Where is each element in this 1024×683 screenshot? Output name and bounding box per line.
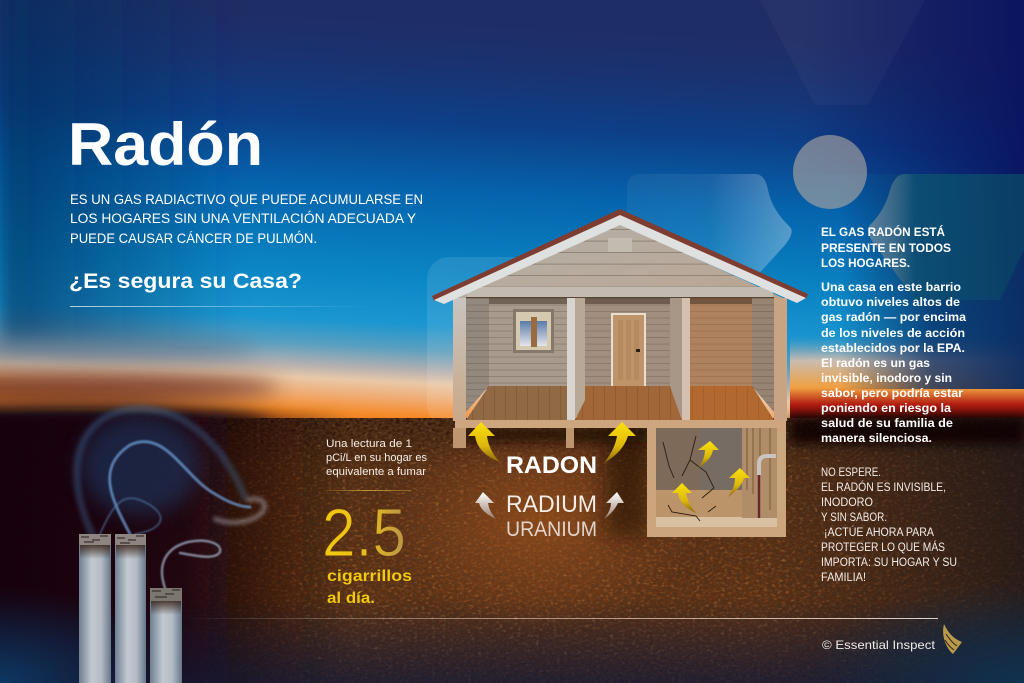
background: evening sky	[0, 0, 1024, 448]
cigarette smoke	[77, 409, 265, 588]
cigarette middle	[115, 534, 146, 683]
white arrow right	[604, 492, 624, 519]
yellow arrow right	[604, 422, 636, 463]
question heading: ¿Es segura su Casa?	[69, 270, 302, 293]
right column: call to action: FAMILIA!	[821, 572, 866, 584]
floor beam and piers	[453, 420, 786, 448]
ground	[0, 410, 1024, 683]
right column: call to action: ¡ACTÚE AHORA PARA	[824, 526, 934, 539]
right column: call to action: PROTEGER LO QUE MÁS	[821, 541, 945, 554]
subtitle: LOS HOGARES SIN UNA VENTILACIÓN ADECUADA Y	[70, 211, 416, 226]
cigarette right	[150, 588, 182, 683]
subtitle: PUEDE CAUSAR CÁNCER DE PULMÓN.	[70, 231, 317, 246]
right column: radon paragraph: de los niveles de acción	[821, 326, 965, 340]
cigarette left	[79, 534, 111, 683]
uranium label: URANIUM	[506, 518, 597, 541]
right column: radon paragraph: manera silenciosa.	[821, 431, 932, 445]
window	[513, 309, 554, 353]
right column: radon paragraph: sabor, pero podría estar	[821, 386, 963, 400]
stat lead-in text	[326, 438, 427, 478]
radiation symbol center	[793, 135, 867, 209]
decorative radiation symbol	[427, 0, 1024, 427]
basement	[647, 428, 786, 537]
stat unit: cigarrillos	[327, 568, 412, 585]
white arrow left	[475, 492, 496, 519]
radiation blade right	[868, 174, 1024, 300]
right column: radon present heading: PRESENTE EN TODOS	[821, 243, 951, 255]
icon: logo wing	[943, 624, 962, 654]
subtitle: ES UN GAS RADIACTIVO QUE PUEDE ACUMULARSE EN	[70, 192, 423, 207]
right column: radon paragraph: Una casa en este barrio	[821, 280, 961, 294]
right column: radon paragraph: El radón es un gas	[821, 356, 930, 370]
right column: radon present heading	[821, 226, 951, 270]
arrows: radon rising	[468, 422, 750, 519]
subtitle	[70, 192, 423, 246]
interior walls	[466, 297, 774, 412]
basement arrow top	[698, 441, 719, 468]
right column: radon paragraph	[821, 280, 966, 445]
radon label: RADON	[506, 452, 597, 479]
basement arrow left	[672, 483, 696, 513]
posts	[453, 298, 787, 421]
stat lead-in text: equivalente a fumar	[326, 466, 426, 478]
basement arrow right	[728, 468, 750, 497]
right column: call to action: Y SIN SABOR.	[821, 512, 887, 524]
right column: radon paragraph: invisible, inodoro y sin	[821, 371, 952, 385]
right column: radon paragraph: salud de su familia de	[821, 416, 953, 430]
right column: radon paragraph: gas radón — por encima	[821, 310, 966, 324]
stat unit: al día.	[327, 590, 375, 607]
radiation blade left	[627, 174, 792, 300]
footer credit: © Essential Inspect	[822, 638, 936, 652]
right column: radon paragraph: obtuvo niveles altos de	[821, 295, 960, 309]
illustration: house cutaway	[432, 209, 808, 537]
roof	[432, 209, 808, 304]
right column: radon present heading: LOS HOGARES.	[821, 258, 910, 270]
right column: radon present heading: EL GAS RADÓN ESTÁ	[821, 226, 945, 239]
gable wall	[457, 224, 783, 298]
stat lead-in text: Una lectura de 1	[326, 438, 412, 450]
right column: call to action: INODORO	[821, 497, 873, 509]
basement pipe	[759, 456, 776, 518]
yellow arrow left	[468, 422, 500, 462]
radiation blade top	[760, 0, 925, 105]
translucent panel left of house	[427, 257, 597, 427]
soil labels	[506, 452, 597, 541]
right column: call to action: EL RADÓN ES INVISIBLE,	[821, 481, 946, 494]
stat number: 2.5	[322, 495, 406, 571]
stat lead-in text: pCi/L en su hogar es	[326, 452, 427, 464]
title: Radón	[68, 111, 263, 178]
stat unit	[327, 568, 412, 607]
right column: radon paragraph: poniendo en riesgo la	[821, 401, 951, 415]
right column: call to action: IMPORTA: SU HOGAR Y SU	[821, 557, 957, 569]
radium label: RADIUM	[506, 491, 597, 518]
porch floor	[466, 386, 774, 420]
right column: radon paragraph: establecidos por la EPA.	[821, 341, 965, 355]
door	[611, 313, 646, 386]
right column: call to action	[821, 467, 957, 584]
right column: call to action: NO ESPERE.	[821, 467, 881, 479]
